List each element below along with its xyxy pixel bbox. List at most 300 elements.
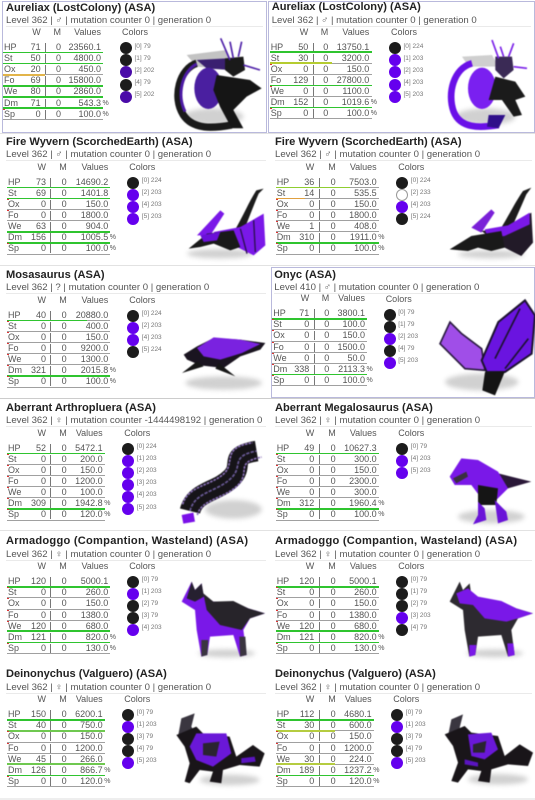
stat table: HP	[277, 576, 289, 586]
stat table: 0	[41, 210, 46, 220]
stat table: 49	[304, 443, 314, 453]
stat table: 0	[303, 64, 308, 74]
stat table: 152	[293, 97, 308, 107]
creature: Deinonychus right	[443, 711, 535, 788]
panel: Deinonychus left: [5] 203	[137, 757, 157, 764]
level line: Level 362 | ♀ | mutation counter -1444498192 | generation 0	[6, 415, 262, 426]
stat table: 0	[303, 108, 308, 118]
stat table: 150.0	[86, 199, 108, 209]
stat table: Dm	[277, 498, 291, 508]
stat table: 120.0	[80, 509, 103, 519]
stat table: 2860.0	[73, 86, 101, 96]
stat table: 0	[41, 343, 46, 353]
stat table: 6200.1	[75, 709, 103, 719]
stat table: 0	[41, 776, 46, 786]
stat table: 0	[62, 199, 67, 209]
panel: Armadoggo left: %	[110, 645, 116, 652]
color list: Colors	[398, 561, 424, 571]
stat table: 30	[298, 53, 308, 63]
stat table: 150.0	[86, 332, 108, 342]
stat table: 0	[56, 86, 61, 96]
stat table: We	[273, 353, 287, 363]
panel: Armadoggo right: [1] 79	[411, 588, 427, 595]
stat table: Fo	[277, 610, 287, 620]
stat table: 0	[331, 765, 336, 775]
color list: Colors	[398, 162, 424, 172]
stat table: Values	[81, 561, 108, 571]
panel: Aberrant Arthropluera: %	[104, 500, 110, 507]
stat table: 0	[324, 308, 329, 318]
panel: Fire Wyvern right: [2] 233	[411, 189, 431, 196]
stat table: 100.0	[342, 375, 365, 385]
panel: Aberrant Megalosaurus: %	[378, 500, 384, 507]
stat table: 1100.0	[342, 86, 369, 96]
stat table: Dm	[277, 765, 291, 775]
creature: purple Aureliax dragon	[447, 39, 528, 131]
stat table: 1237.2	[344, 765, 372, 775]
stat table: 0	[304, 375, 309, 385]
stat table: Fo	[277, 210, 287, 220]
stat table: 2113.3	[338, 364, 365, 374]
heading: Mosasaurus (ASA)	[6, 269, 105, 281]
stat table: Ox	[8, 199, 20, 209]
panel: Onyc: [5] 203	[398, 357, 418, 364]
stat table: 0	[323, 86, 328, 96]
stat table: Sp	[8, 509, 19, 519]
stat table: 200.0	[80, 454, 103, 464]
color list: Colors	[393, 694, 419, 704]
stat table: 0	[309, 476, 314, 486]
panel: Aureliax left	[2, 1, 267, 133]
stat table: Dm	[8, 365, 22, 375]
heading: Armadoggo (Compantion, Wasteland) (ASA)	[6, 535, 248, 547]
stat table: 0	[323, 97, 328, 107]
stat table: Ox	[277, 465, 288, 475]
stat table: 0	[56, 64, 61, 74]
stat table: 0	[62, 232, 67, 242]
stat table: 450.0	[78, 64, 101, 74]
stat table: Dm	[8, 232, 22, 242]
panel: Aberrant Megalosaurus	[275, 402, 532, 526]
level line: Level 362 | ♀ | mutation counter 0 | generation 0	[275, 549, 480, 560]
stat table: 0	[331, 177, 336, 187]
stat table: 1005.5	[81, 232, 108, 242]
stat table: 1401.8	[81, 188, 108, 198]
panel: Fire Wyvern left: %	[110, 234, 116, 241]
stat table: Ox	[4, 64, 16, 74]
stat table: Dm	[4, 98, 18, 108]
stat table: 3200.0	[342, 53, 369, 63]
stat table: 0	[41, 243, 46, 253]
stat table: 0	[331, 776, 336, 786]
stat table: 312	[299, 498, 314, 508]
stat table: 100.0	[354, 243, 377, 253]
stat table: 120	[31, 576, 46, 586]
stat table: 0	[62, 354, 67, 364]
stat table: 150.0	[80, 465, 103, 475]
panel: Deinonychus right: [0] 79	[406, 709, 422, 716]
panel: Deinonychus left	[6, 668, 266, 788]
stat table: Values	[338, 293, 365, 303]
stat table: 0	[62, 776, 67, 786]
panel: Aberrant Arthropluera: [1] 203	[137, 455, 157, 462]
stat table: 0	[304, 353, 309, 363]
color list	[396, 561, 431, 636]
stat table: W	[306, 561, 314, 571]
stat table: St	[277, 587, 285, 597]
stat table: Sp	[277, 643, 288, 653]
stat table: 10627.3	[344, 443, 377, 453]
stat table: St	[8, 321, 17, 331]
stat table: 0	[309, 487, 314, 497]
creature: dark Aureliax dragon	[173, 38, 262, 132]
stat table: 0	[331, 610, 336, 620]
stat table: 0	[62, 332, 67, 342]
stat table: Fo	[8, 343, 19, 353]
stat table: St	[277, 454, 285, 464]
stat table: 40	[36, 720, 46, 730]
stat table: 0	[41, 598, 46, 608]
stat table: M	[59, 428, 67, 438]
stat table: 120	[299, 576, 314, 586]
creature: Onyc bat	[438, 298, 535, 396]
stat table: 0	[62, 765, 67, 775]
stat table: 0	[323, 64, 328, 74]
stat table: St	[277, 720, 285, 730]
stat table: 0	[324, 330, 329, 340]
stat table: 112	[300, 709, 314, 719]
stat table: 1800.0	[81, 210, 108, 220]
stat table: 0	[331, 221, 336, 231]
stat table: 0	[62, 221, 67, 231]
stat table: Values	[81, 295, 108, 305]
stat table: 1200.0	[75, 743, 103, 753]
stat table: HP	[8, 576, 21, 586]
stat table: 0	[309, 598, 314, 608]
stat table: 150.0	[347, 64, 369, 74]
stat table: 0	[62, 243, 67, 253]
stat table: Fo	[8, 210, 19, 220]
stat table: 0	[324, 353, 329, 363]
stat table: W	[306, 162, 314, 172]
stat table: 0	[331, 743, 336, 753]
stat table: M	[59, 561, 67, 571]
stat table: 1960.4	[349, 498, 377, 508]
stat table: 23560.1	[68, 42, 101, 52]
panel: Deinonychus right	[270, 664, 535, 798]
stat table: 1200.0	[75, 476, 103, 486]
stat table: W	[38, 561, 46, 571]
stat table: 69	[31, 75, 41, 85]
stat table: 0	[323, 42, 328, 52]
panel: Fire Wyvern right	[275, 136, 534, 260]
stat table: 150.0	[349, 731, 372, 741]
stat table: W	[32, 27, 41, 37]
stat table: 0	[56, 42, 61, 52]
panel: Mosasaurus: [5] 224	[142, 346, 162, 353]
stat table	[7, 162, 116, 255]
stat table: 0	[309, 610, 314, 620]
heading: Armadoggo (Compantion, Wasteland) (ASA)	[275, 535, 517, 547]
stat table: M	[54, 27, 61, 37]
stat table: Dm	[8, 765, 22, 775]
stat table: HP	[8, 443, 21, 453]
stat table: 0	[324, 342, 329, 352]
panel: Mosasaurus: %	[110, 367, 116, 374]
stat table: 0	[62, 177, 67, 187]
stat table: 1	[309, 221, 314, 231]
stat table: 0	[309, 465, 314, 475]
stat table: 120.0	[349, 776, 372, 786]
stat table	[272, 293, 373, 386]
stat table: 0	[62, 643, 67, 653]
stat table: W	[38, 295, 46, 305]
stat table: Sp	[8, 643, 19, 653]
stat table: We	[277, 487, 290, 497]
creature: Fire Wyvern dark	[450, 187, 534, 260]
panel: Fire Wyvern left: %	[110, 245, 116, 252]
stat table: 0	[331, 498, 336, 508]
heading: Fire Wyvern (ScorchedEarth) (ASA)	[275, 136, 462, 148]
stat table: Fo	[271, 75, 281, 85]
stat table: We	[271, 86, 284, 96]
color list	[127, 295, 162, 358]
stat table: Sp	[277, 243, 288, 253]
stat table: 820.0	[86, 632, 108, 642]
stat table: St	[8, 188, 17, 198]
stat table: 0	[309, 743, 314, 753]
panel: Aberrant Arthropluera	[6, 402, 266, 524]
stat table: 0	[41, 587, 46, 597]
level line: Level 362 | ♀ | mutation counter 0 | generation 0	[275, 682, 480, 693]
color list	[127, 162, 162, 225]
stat table: Fo	[277, 476, 287, 486]
stat table: Dm	[8, 498, 22, 508]
stat table: 0	[331, 509, 336, 519]
stat table: 0	[331, 232, 336, 242]
stat table: 1800.0	[349, 210, 377, 220]
stat table: 50	[298, 42, 308, 52]
stat table: Ox	[277, 731, 288, 741]
creature: Mosasaurus	[182, 336, 266, 392]
panel: Fire Wyvern right: [5] 224	[411, 213, 431, 220]
color list	[393, 694, 463, 705]
stat table: 820.0	[354, 632, 377, 642]
stat table: 0	[331, 188, 336, 198]
stat table: 5000.1	[81, 576, 108, 586]
panel: Aberrant Arthropluera: [2] 203	[137, 467, 157, 474]
stat table: Ox	[8, 332, 20, 342]
stat table: 0	[41, 321, 46, 331]
stat table: 20	[31, 64, 41, 74]
color list	[122, 694, 157, 769]
stat table: We	[4, 86, 17, 96]
stat table: Ox	[8, 465, 20, 475]
panel: Fire Wyvern left: [4] 203	[142, 201, 162, 208]
stat table: 600.0	[349, 720, 372, 730]
stat table: M	[328, 561, 336, 571]
panel: Aureliax left: %	[102, 100, 109, 107]
panel: Armadoggo left: %	[110, 634, 116, 641]
stat table: 45	[36, 754, 46, 764]
stat table: Sp	[8, 776, 19, 786]
panel: Aureliax left: [4] 79	[134, 79, 151, 86]
panel: Mosasaurus	[6, 269, 266, 392]
panel: Aberrant Arthropluera: [5] 203	[137, 504, 157, 511]
panel: Aureliax left: [0] 79	[134, 43, 151, 50]
stat table: Sp	[4, 109, 15, 119]
stat table: 0	[41, 199, 46, 209]
stat table: 310	[299, 232, 314, 242]
heading: Aureliax (LostColony) (ASA)	[6, 2, 155, 14]
stat table: 0	[62, 731, 67, 741]
stat table: 189	[299, 765, 314, 775]
panel: Deinonychus left: %	[104, 767, 110, 774]
stat table: W	[300, 27, 308, 37]
stat table	[276, 428, 384, 521]
stat table: 0	[62, 754, 67, 764]
stat table: 543.3	[78, 98, 101, 108]
stat table: 0	[62, 632, 67, 642]
panel: Armadoggo right: [4] 79	[411, 624, 427, 631]
stat table: 4800.0	[73, 53, 101, 63]
stat table: 30	[304, 720, 314, 730]
stat table: 0	[62, 321, 67, 331]
panel: Deinonychus right: %	[373, 767, 379, 774]
stat table: 0	[309, 731, 314, 741]
panel: Fire Wyvern right: [4] 203	[411, 201, 431, 208]
stat table: M	[328, 428, 336, 438]
stat table: M	[322, 293, 329, 303]
panel: Onyc: [1] 79	[398, 321, 414, 328]
level line: Level 362 | ♂ | mutation counter 0 | generation 0	[272, 15, 477, 26]
color list	[127, 561, 162, 636]
stat table: 1500.0	[337, 342, 365, 352]
stat table: 0	[331, 754, 336, 764]
stat table: Sp	[271, 108, 282, 118]
panel: Deinonychus left: %	[104, 778, 110, 785]
stat table: 0	[62, 743, 67, 753]
creature: Megalosaurus	[449, 458, 532, 526]
panel: Aureliax right: [2] 203	[404, 67, 423, 74]
stat table: HP	[277, 443, 289, 453]
stat table: 130.0	[354, 643, 377, 653]
creature: Fire Wyvern purple	[186, 188, 266, 260]
stat table: 73	[36, 177, 46, 187]
stat table: 0	[331, 454, 336, 464]
stat table: 150.0	[80, 731, 103, 741]
stat table: 0	[62, 365, 67, 375]
panel: Fire Wyvern right: %	[378, 245, 384, 252]
panel: Fire Wyvern left: [0] 224	[142, 177, 162, 184]
color list: Colors	[386, 294, 412, 304]
stat table: M	[59, 162, 67, 172]
stat table: 13750.1	[337, 42, 369, 52]
stat table: 50.0	[347, 353, 365, 363]
stat table: Dm	[273, 364, 287, 374]
stat table: We	[277, 221, 290, 231]
stat table: 0	[62, 709, 67, 719]
stat table: 5472.1	[75, 443, 103, 453]
stat table: 0	[62, 210, 67, 220]
stat table	[7, 561, 116, 654]
stat table: 0	[309, 243, 314, 253]
stat table: 408.0	[354, 221, 377, 231]
color list: Colors	[122, 27, 148, 37]
stat table: 0	[41, 743, 46, 753]
stat table: W	[38, 428, 46, 438]
stat table: 0	[331, 465, 336, 475]
panel: Deinonychus left: [4] 79	[137, 745, 153, 752]
stat table: 0	[56, 98, 61, 108]
stat table: Fo	[273, 342, 284, 352]
stat table	[270, 27, 377, 119]
stat table: 0	[323, 75, 328, 85]
stat table: 1200.0	[344, 743, 372, 753]
stat table: 0	[36, 109, 41, 119]
stat table: 150.0	[354, 465, 377, 475]
stat table: 0	[304, 330, 309, 340]
color list: Colors	[391, 27, 417, 37]
stat table: 0	[62, 621, 67, 631]
stat table: 0	[331, 199, 336, 209]
stat table: 1300.0	[81, 354, 108, 364]
stat table: 0	[309, 643, 314, 653]
stat table: 0	[41, 465, 46, 475]
stat table: 1380.0	[81, 610, 108, 620]
panel: Deinonychus left: [3] 79	[137, 733, 153, 740]
stat table: W	[306, 428, 314, 438]
stat table: 0	[62, 587, 67, 597]
stat table: 71	[299, 308, 309, 318]
panel: Fire Wyvern right: [0] 224	[411, 177, 431, 184]
panel: Deinonychus left: [0] 79	[137, 709, 153, 716]
stat table: 0	[62, 376, 67, 386]
stat table: 535.5	[354, 188, 377, 198]
panel: Onyc: [0] 79	[398, 309, 414, 316]
stat table: 309	[31, 498, 46, 508]
stat table: 156	[31, 232, 46, 242]
stat table: 904.0	[86, 221, 108, 231]
level line: Level 362 | ♂ | mutation counter 0 | generation 0	[275, 149, 480, 160]
stat table: 0	[62, 454, 67, 464]
stat table: 100.0	[78, 109, 101, 119]
panel: Aureliax left: %	[102, 111, 109, 118]
level line: Level 410 | ♂ | mutation counter 0 | generation 0	[274, 282, 479, 293]
stat table: Ox	[273, 330, 285, 340]
creature: Deinonychus left	[173, 710, 267, 788]
stat table: 129	[293, 75, 308, 85]
stat table: 300.0	[354, 487, 377, 497]
stat table: 0	[41, 476, 46, 486]
stat table: M	[59, 694, 67, 704]
stat table: 126	[31, 765, 46, 775]
stat table: Fo	[8, 743, 19, 753]
panel: Armadoggo left	[6, 535, 266, 660]
stat table: St	[4, 53, 13, 63]
stat table: 14	[304, 188, 314, 198]
stat table: St	[271, 53, 279, 63]
panel: Aberrant Megalosaurus: %	[378, 511, 384, 518]
stat table: 0	[331, 576, 336, 586]
stat table: 0	[331, 731, 336, 741]
panel: Fire Wyvern left: [2] 203	[142, 189, 162, 196]
heading: Onyc (ASA)	[274, 269, 336, 281]
heading: Fire Wyvern (ScorchedEarth) (ASA)	[6, 136, 193, 148]
panel: Aureliax right: [4] 203	[404, 79, 423, 86]
panel: Deinonychus right: [4] 79	[406, 745, 422, 752]
panel: Deinonychus right: [3] 79	[406, 733, 422, 740]
